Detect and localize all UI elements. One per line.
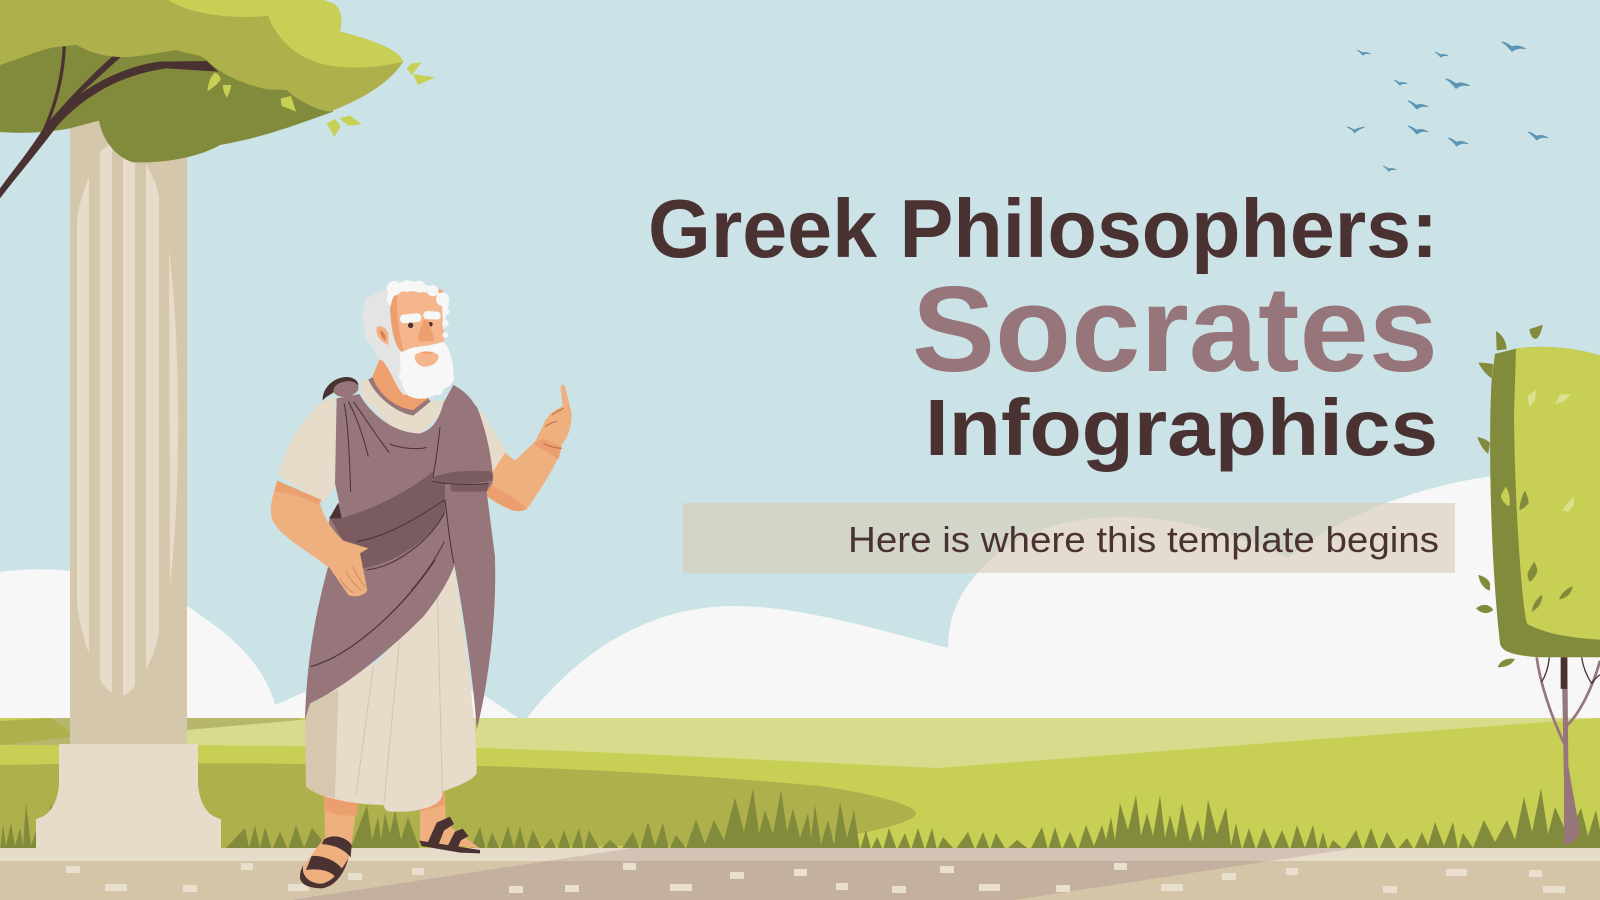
Socrates figure: [271, 280, 572, 888]
trunk and branches: [1537, 657, 1600, 845]
lowered arm and hand: [271, 481, 368, 596]
tree canopy top left: [0, 0, 435, 198]
grass: [0, 788, 1600, 850]
birds: [1347, 42, 1548, 171]
bush: [1490, 347, 1600, 657]
canopy leaves: [207, 62, 435, 137]
raised arm: [473, 385, 572, 511]
waist sash: [329, 472, 445, 569]
sleeve and torso: [278, 358, 495, 565]
shoulder flap: [432, 385, 492, 492]
face: [390, 287, 444, 352]
robe and skirt: [305, 560, 495, 812]
front hair: [387, 280, 449, 338]
bush leaves: [1476, 325, 1573, 667]
eyebrows and eyes: [400, 313, 422, 324]
drapery lines: [344, 402, 488, 590]
column base: [36, 744, 221, 848]
meadow: [0, 718, 1600, 853]
beard: [399, 342, 454, 399]
head: [362, 280, 454, 399]
column: [36, 110, 221, 848]
branches: [0, 43, 218, 198]
shoulder clasp: [323, 377, 360, 401]
title line 1: Greek Philosophers:: [648, 182, 1438, 275]
paving stones: [66, 863, 1565, 893]
title line 3: Infographics: [925, 383, 1438, 472]
column shaft: [70, 110, 187, 750]
clouds: [0, 474, 1600, 725]
legs and sandals: [300, 790, 480, 888]
subtitle: Here is where this template begins: [848, 519, 1439, 560]
nose: [418, 320, 434, 341]
hill: [0, 763, 916, 850]
column flutes: [77, 130, 178, 695]
subtitle banner: [683, 503, 1455, 573]
path ground: [0, 848, 1600, 900]
right tree: [1476, 325, 1600, 845]
title line 2: Socrates: [912, 261, 1438, 397]
back hair: [362, 290, 417, 395]
ear: [376, 326, 388, 345]
